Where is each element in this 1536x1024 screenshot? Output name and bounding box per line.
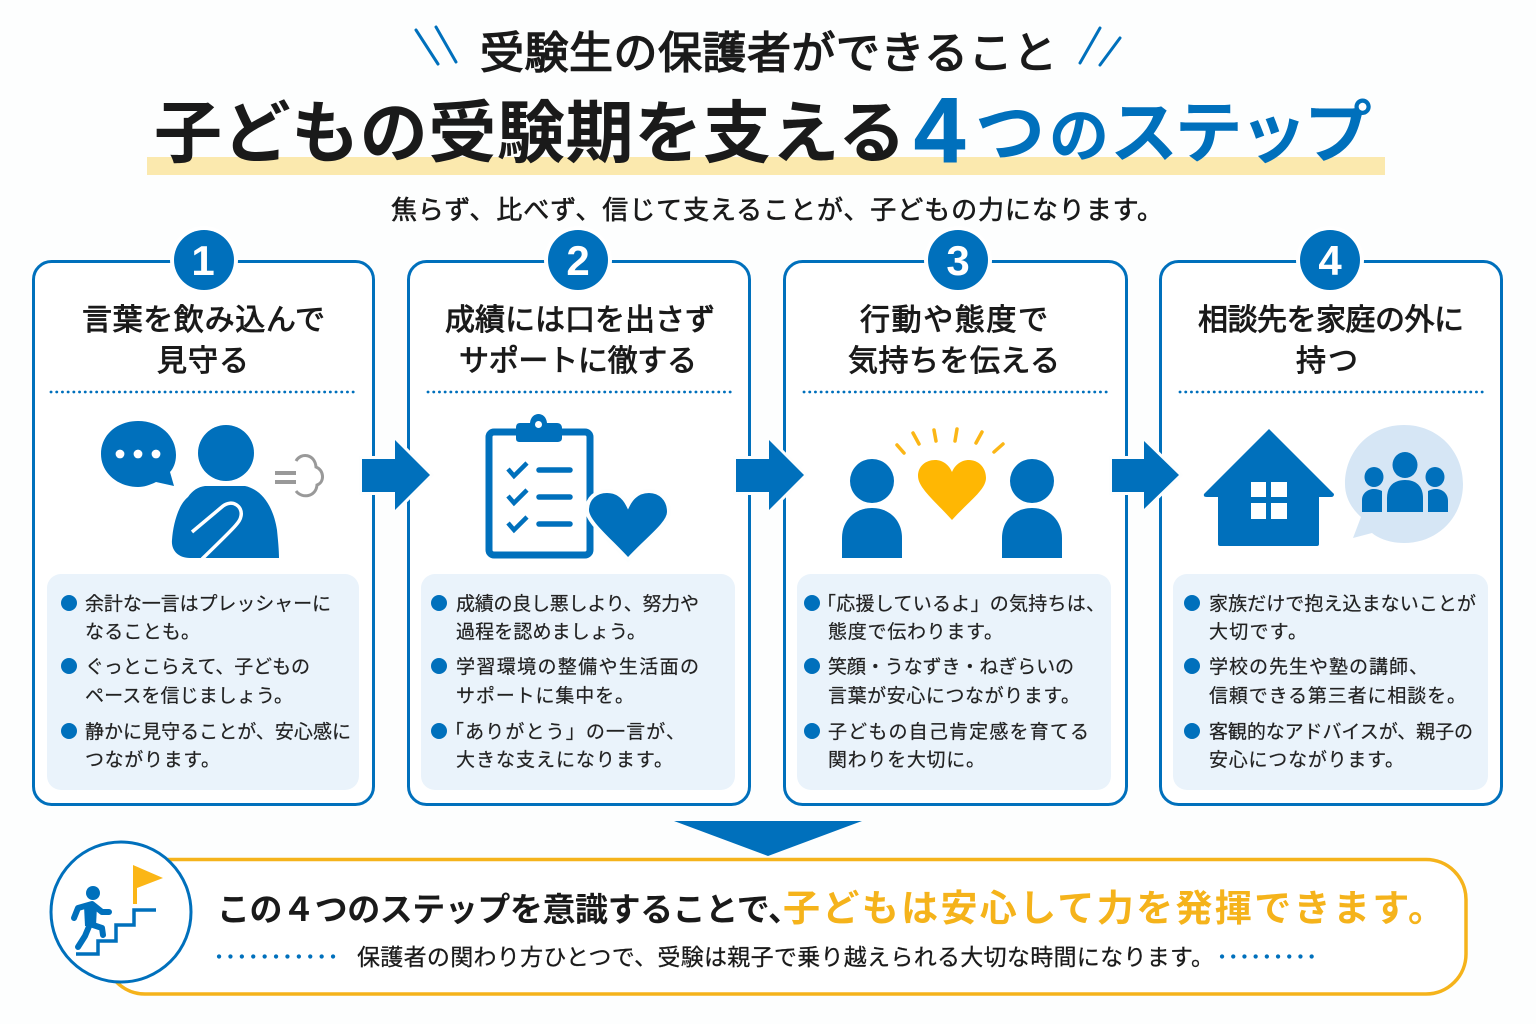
text panel: step 2: 大きな支えになります。 [456, 749, 673, 771]
heading: step 2 [445, 304, 715, 378]
heading: step 1: 見守る [157, 345, 249, 378]
text panel: step 4: 安心につながります。 [1209, 749, 1404, 771]
highlight bar [147, 157, 1385, 175]
step number 1 [174, 230, 234, 290]
text panel: step 4: 大切です。 [1209, 621, 1307, 643]
main heading: 4 [914, 80, 965, 182]
icon: climbing stairs toward flag [51, 842, 191, 982]
text panel: step 3: 子どもの自己肯定感を育てる [828, 721, 1089, 743]
heading: step 3: 気持ちを伝える [848, 345, 1060, 378]
arrow: step 3 to 4 [1112, 441, 1179, 509]
panel: step 2 [408, 226, 750, 804]
text panel: step 3: 関わりを大切に。 [828, 749, 985, 771]
text panel: step 4: 学校の先生や塾の講師、 [1209, 656, 1428, 678]
heading: step 1 [82, 304, 325, 378]
main heading: つ [975, 94, 1045, 172]
callout main line [217, 888, 1445, 929]
subtitle: 焦らず、比べず、信じて支えることが、子どもの力になります。 [391, 195, 1163, 225]
arrow: down triangle [674, 821, 862, 856]
text panel: step 1: ペースを信じましょう。 [85, 685, 293, 707]
main heading: の [1049, 103, 1109, 170]
main heading: ステップ [1110, 96, 1372, 172]
text panel: step 1: ぐっとこらえて、子どもの [85, 656, 310, 678]
text panel: step 3: 「応援しているよ」の気持ちは、 [817, 593, 1105, 615]
text panel: step 4: 信頼できる第三者に相談を。 [1209, 685, 1466, 707]
step number 2: 2 [566, 237, 590, 284]
text panel: step 3 [797, 574, 1111, 790]
icon: person holding back words [101, 421, 323, 559]
text panel: step 2: 「ありがとう」の一言が、 [445, 721, 685, 743]
text panel: step 3: 言葉が安心につながります。 [828, 685, 1080, 707]
step number 4: 4 [1318, 237, 1342, 284]
heading: step 2: 成績には口を出さず [445, 304, 715, 337]
text panel: step 4: 客観的なアドバイスが、親子の [1209, 721, 1473, 743]
heading: step 4: 持つ [1296, 345, 1358, 378]
heading: step 3 [848, 304, 1060, 378]
callout sub line: 保護者の関わり方ひとつで、受験は親子で乗り越えられる大切な時間になります。 [357, 944, 1214, 970]
callout: summary [51, 842, 1466, 994]
text panel: step 3: 態度で伝わります。 [828, 621, 1003, 643]
heading: step 2: サポートに徹する [459, 345, 697, 378]
panel: step 3 [784, 226, 1126, 804]
step number 3 [928, 230, 988, 290]
text panel: step 2: 成績の良し悪しより、努力や [456, 593, 699, 615]
text panel: step 4 [1173, 574, 1488, 790]
text panel: step 1: なることも。 [85, 622, 200, 643]
icon: two people with heart [842, 429, 1062, 558]
text panel: step 1 [47, 574, 359, 790]
callout main line: 子どもは安心して力を発揮できます。 [783, 888, 1445, 929]
step number 4 [1300, 230, 1360, 290]
text panel: step 3: 笑顔・うなずき・ねぎらいの [828, 656, 1074, 678]
step number 2 [548, 230, 608, 290]
heading: step 3: 行動や態度で [860, 304, 1048, 337]
text panel: step 1: 余計な一言はプレッシャーに [85, 593, 331, 615]
icon: house and speech bubble [1204, 425, 1463, 546]
text panel: step 2: 過程を認めましょう。 [456, 621, 646, 643]
icon: clipboard with heart [489, 414, 669, 560]
text panel: step 1: つながります。 [85, 749, 220, 771]
step number 1: 1 [191, 237, 215, 284]
panel: step 1 [34, 226, 374, 804]
arrow: step 1 to 2 [362, 440, 430, 510]
heading: step 4: 相談先を家庭の外に [1198, 304, 1464, 337]
arrow: step 2 to 3 [736, 440, 804, 510]
title block [147, 27, 1385, 225]
eyebrow heading: 受験生の保護者ができること [480, 29, 1057, 78]
text panel: step 1: 静かに見守ることが、安心感に [85, 721, 351, 743]
text panel: step 2 [421, 574, 735, 790]
step number 3: 3 [946, 237, 970, 284]
text panel: step 2: サポートに集中を。 [456, 685, 634, 707]
callout main line: この４つのステップを意識することで、 [217, 891, 801, 928]
text panel: step 2: 学習環境の整備や生活面の [456, 656, 699, 678]
main heading [154, 80, 1372, 182]
main heading: 子どもの受験期を支える [154, 96, 906, 172]
heading: step 1: 言葉を飲み込んで [82, 304, 325, 337]
heading: step 4 [1198, 304, 1464, 378]
panel: step 4 [1160, 226, 1502, 804]
text panel: step 4: 家族だけで抱え込まないことが [1209, 593, 1476, 615]
